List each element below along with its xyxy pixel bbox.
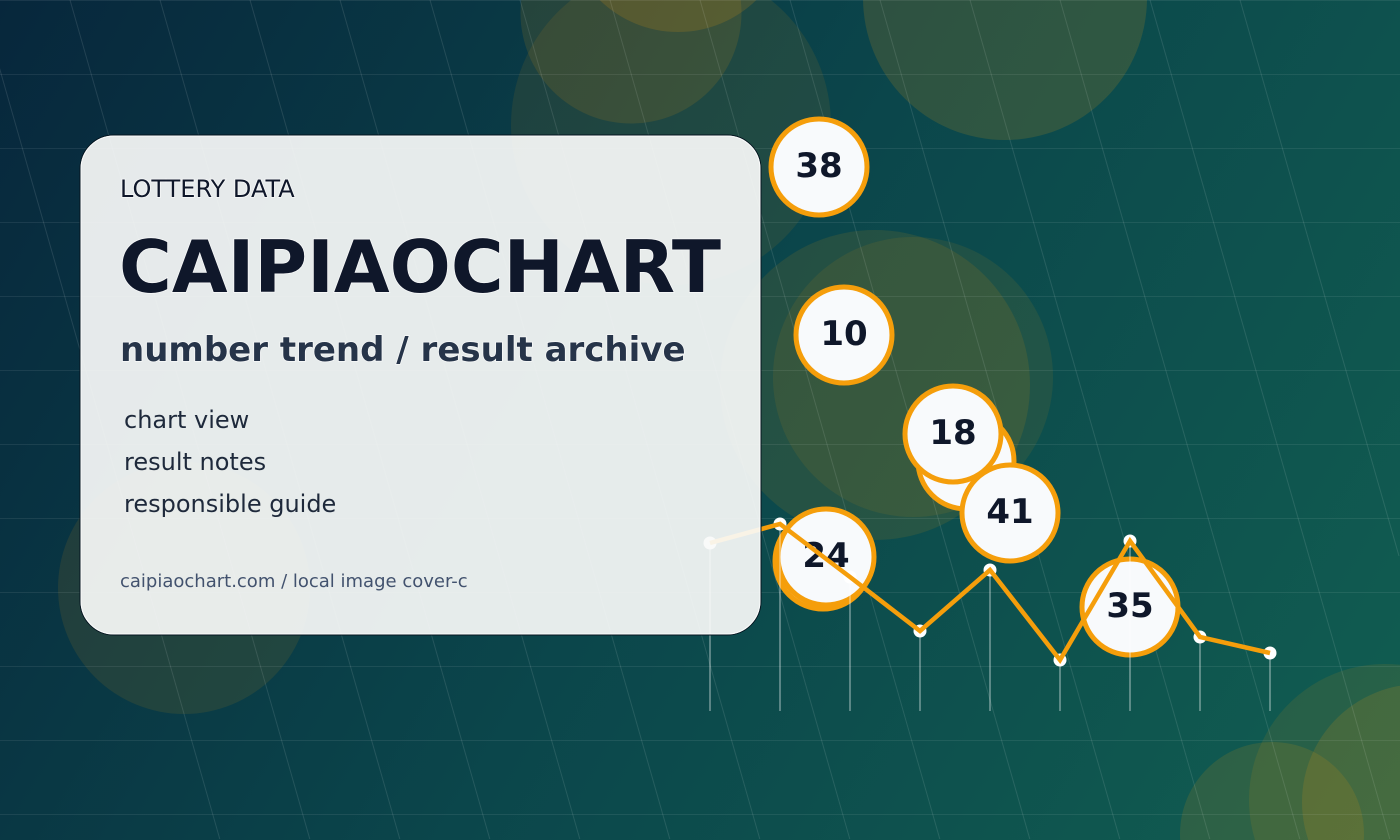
subtitle: number trend / result archive bbox=[120, 330, 686, 370]
title: CAIPIAOCHART bbox=[119, 225, 721, 309]
ball 10: 10 bbox=[820, 314, 868, 354]
hidden ball behind 18 and 41 bbox=[918, 413, 1014, 509]
feature list: chart view bbox=[124, 406, 249, 434]
feature list bbox=[124, 406, 336, 518]
ball 24 bbox=[778, 509, 874, 605]
info card bbox=[80, 135, 761, 635]
feature list: responsible guide bbox=[124, 490, 336, 518]
feature list: result notes bbox=[124, 448, 266, 476]
lottery balls bbox=[771, 119, 1178, 655]
ball 41 bbox=[962, 465, 1058, 561]
ball 18: 18 bbox=[929, 413, 977, 453]
ball 35: 35 bbox=[1106, 586, 1154, 626]
ball 18 bbox=[905, 386, 1001, 482]
ball under 24 bbox=[775, 513, 871, 609]
ball 10 bbox=[796, 287, 892, 383]
footer note: caipiaochart.com / local image cover-c bbox=[120, 571, 468, 592]
trend line chart bbox=[704, 518, 1276, 711]
ball 41: 41 bbox=[986, 492, 1034, 532]
eyebrow label: LOTTERY DATA bbox=[120, 175, 295, 203]
ball 24: 24 bbox=[802, 536, 850, 576]
ball 38: 38 bbox=[795, 146, 843, 186]
ball 38 bbox=[771, 119, 867, 215]
ball 35 bbox=[1082, 559, 1178, 655]
